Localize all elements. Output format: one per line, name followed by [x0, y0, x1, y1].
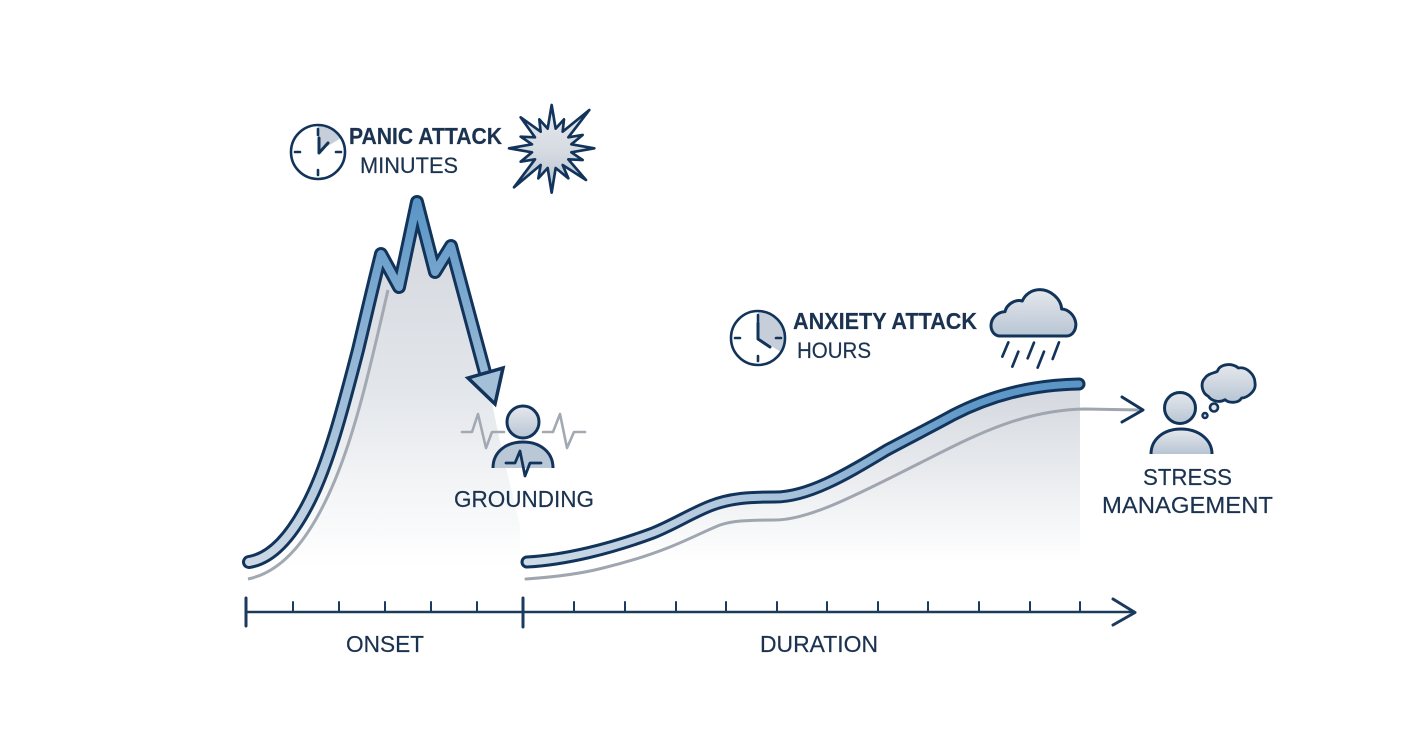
icon: clock minutes — [291, 125, 345, 179]
panic arrowhead — [468, 368, 503, 404]
icon: grounding person with pulse — [462, 406, 585, 476]
anxiety baseline arrow — [526, 397, 1143, 579]
anxiety area fill — [525, 385, 1080, 578]
icon: stress management person with thought — [1151, 365, 1255, 454]
axis label: onset: ONSET — [346, 631, 424, 657]
heading: anxiety attack: ANXIETY ATTACK — [793, 308, 977, 334]
label: stress management: MANAGEMENT — [1102, 492, 1273, 518]
panic baseline curve — [248, 290, 388, 579]
anxiety intensity ribbon — [527, 384, 1079, 562]
panic attack chart — [248, 202, 520, 580]
label: stress management — [1102, 464, 1273, 518]
time axis — [246, 598, 1135, 627]
axis label: duration: DURATION — [760, 631, 878, 657]
panic area fill — [248, 202, 520, 580]
text: minutes: MINUTES — [360, 153, 458, 178]
panic intensity ribbon — [249, 202, 487, 562]
icon: rain cloud — [991, 290, 1076, 368]
label: grounding: GROUNDING — [454, 486, 594, 512]
text: hours: HOURS — [797, 338, 871, 363]
icon: clock hours — [731, 311, 785, 365]
anxiety attack chart — [525, 384, 1143, 579]
icon: burst star — [509, 105, 594, 193]
heading: panic attack: PANIC ATTACK — [349, 123, 502, 149]
label: stress management: STRESS — [1143, 464, 1232, 490]
